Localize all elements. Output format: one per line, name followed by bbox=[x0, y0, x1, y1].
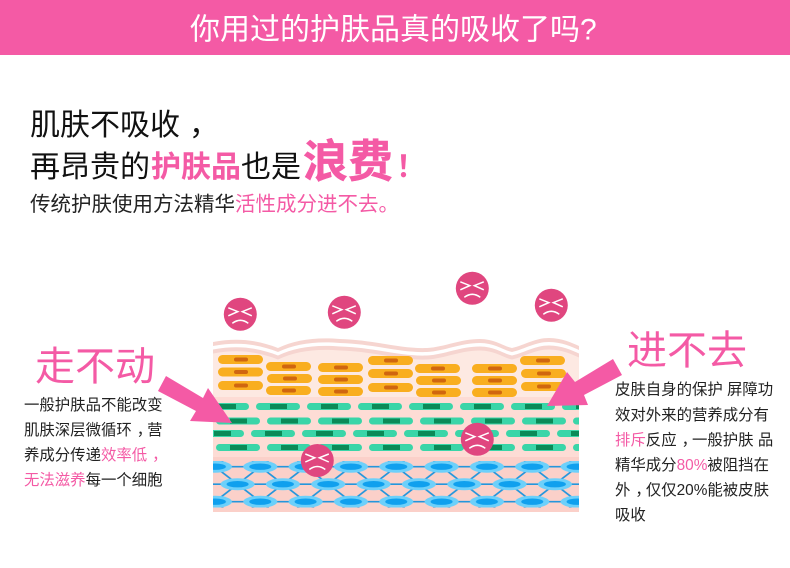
right text block bbox=[615, 380, 773, 524]
headline text block: 再昂贵的 bbox=[30, 151, 150, 184]
blue cell mesh layer bbox=[213, 461, 579, 508]
yellow cells layer bbox=[218, 355, 566, 397]
right heading: 进不去 bbox=[627, 329, 747, 373]
subheading: 传统护肤使用方法精华活性成分进不去。 bbox=[30, 193, 399, 216]
headline text block bbox=[30, 109, 426, 187]
icon: sad face 4 bbox=[535, 289, 568, 322]
title: 你用过的护肤品真的吸收了吗? bbox=[190, 14, 597, 46]
icon: sad face 5 bbox=[301, 444, 334, 477]
right text block: 皮肤自身的保护 屏障功 bbox=[615, 380, 773, 398]
right text block: 效对外来的营养成分有 bbox=[615, 406, 769, 424]
left text block: 一般护肤品不能改变 bbox=[24, 396, 163, 414]
right text block: 外 ，仅仅20%能被皮肤 bbox=[615, 481, 769, 499]
left text block: 无法滋养每一个细胞 bbox=[24, 471, 163, 489]
icon: sad face 3 bbox=[456, 272, 489, 305]
icon: sad face 2 bbox=[328, 296, 361, 329]
headline text block: 也是 bbox=[241, 151, 301, 184]
right text block: 吸收 bbox=[615, 506, 646, 524]
arrow: right pointing into skin bbox=[547, 359, 622, 406]
icon: sad face 1 bbox=[224, 298, 257, 331]
headline text block: ！ bbox=[396, 151, 426, 184]
skin background bbox=[213, 338, 579, 512]
headline text block: 肌肤不吸收 ， bbox=[30, 109, 219, 142]
left text block: 养成分传递效率低 ， bbox=[24, 446, 168, 464]
arrow: left pointing into skin bbox=[158, 376, 232, 423]
skin layer diagram bbox=[213, 338, 579, 512]
green cells layer bbox=[213, 403, 579, 451]
left text block bbox=[24, 396, 168, 489]
header banner bbox=[0, 0, 790, 55]
left text block: 肌肤深层微循环 ，营 bbox=[24, 421, 163, 439]
right text block: 精华成分80%被阻挡在 bbox=[615, 456, 769, 474]
left heading: 走不动 bbox=[35, 345, 155, 389]
headline text block: 护肤品 bbox=[151, 151, 241, 184]
right text block: 排斥反应 ，一般护肤 品 bbox=[615, 430, 773, 449]
headline text block: 浪费 bbox=[303, 136, 393, 187]
icon: sad face 6 bbox=[461, 423, 494, 456]
